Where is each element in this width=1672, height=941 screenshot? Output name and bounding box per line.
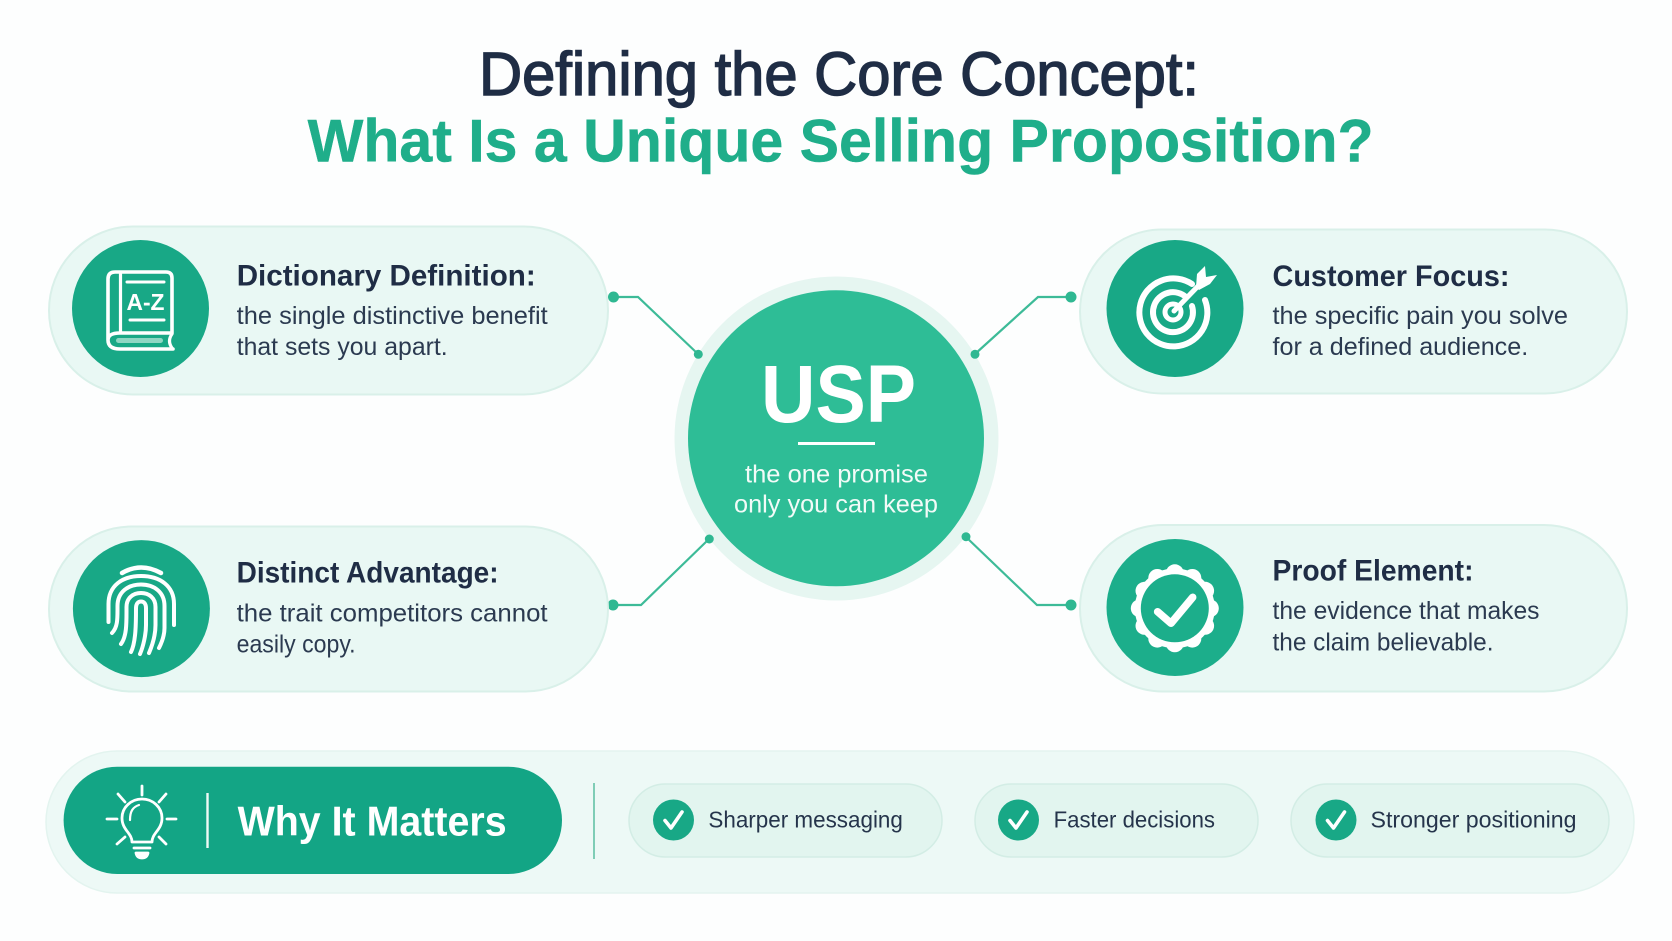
icon: light bulb — [107, 786, 176, 858]
panel: proof element: Proof Element: — [1272, 555, 1474, 588]
panel: dictionary definition: that sets you apart. — [237, 333, 448, 361]
chip: stronger positioning: Stronger positioning — [1370, 806, 1576, 832]
icon: fingerprint — [108, 568, 174, 654]
icon: A-Z book — [108, 272, 173, 349]
chip: faster decisions: Faster decisions — [1054, 806, 1215, 832]
panel: dictionary definition: the single distinctive benefit — [237, 302, 548, 330]
panel: proof element: the evidence that makes — [1272, 597, 1540, 625]
title: Defining the Core Concept: — [479, 40, 1199, 108]
central USP circle — [674, 276, 998, 600]
chip: stronger positioning — [1291, 784, 1609, 857]
panel: distinct advantage: the trait competitors cannot — [237, 600, 548, 628]
panel: distinct advantage: Distinct Advantage: — [237, 557, 499, 590]
panel: distinct advantage: easily copy. — [237, 631, 356, 659]
icon: target with arrow — [1139, 266, 1217, 346]
panel: proof element: the claim believable. — [1272, 629, 1494, 657]
panel: distinct advantage — [49, 526, 608, 692]
panel: why it matters bar — [46, 751, 1634, 893]
title: What Is a Unique Selling Proposition? — [308, 108, 1374, 175]
connector lines — [608, 292, 1076, 610]
panel: dictionary definition: Dictionary Definition: — [237, 260, 536, 293]
panel: customer focus — [1080, 230, 1627, 394]
why it matters pill: Why It Matters — [238, 798, 507, 845]
chip: sharper messaging — [629, 784, 942, 857]
panel: customer focus: Customer Focus: — [1272, 260, 1510, 293]
icon: check badge — [1131, 564, 1219, 652]
title — [308, 40, 1374, 175]
central USP circle: the one promise — [745, 461, 928, 489]
central USP circle: only you can keep — [734, 490, 938, 518]
panel: dictionary definition — [49, 226, 608, 394]
panel: customer focus: for a defined audience. — [1272, 333, 1528, 361]
panel: proof element — [1080, 525, 1627, 692]
panel: customer focus: the specific pain you solve — [1272, 302, 1568, 330]
chip: sharper messaging: Sharper messaging — [708, 806, 903, 832]
icon: A-Z book: A-Z — [126, 289, 164, 315]
why it matters pill — [64, 767, 562, 874]
chip: faster decisions — [975, 784, 1258, 857]
central USP circle: USP — [761, 349, 916, 440]
